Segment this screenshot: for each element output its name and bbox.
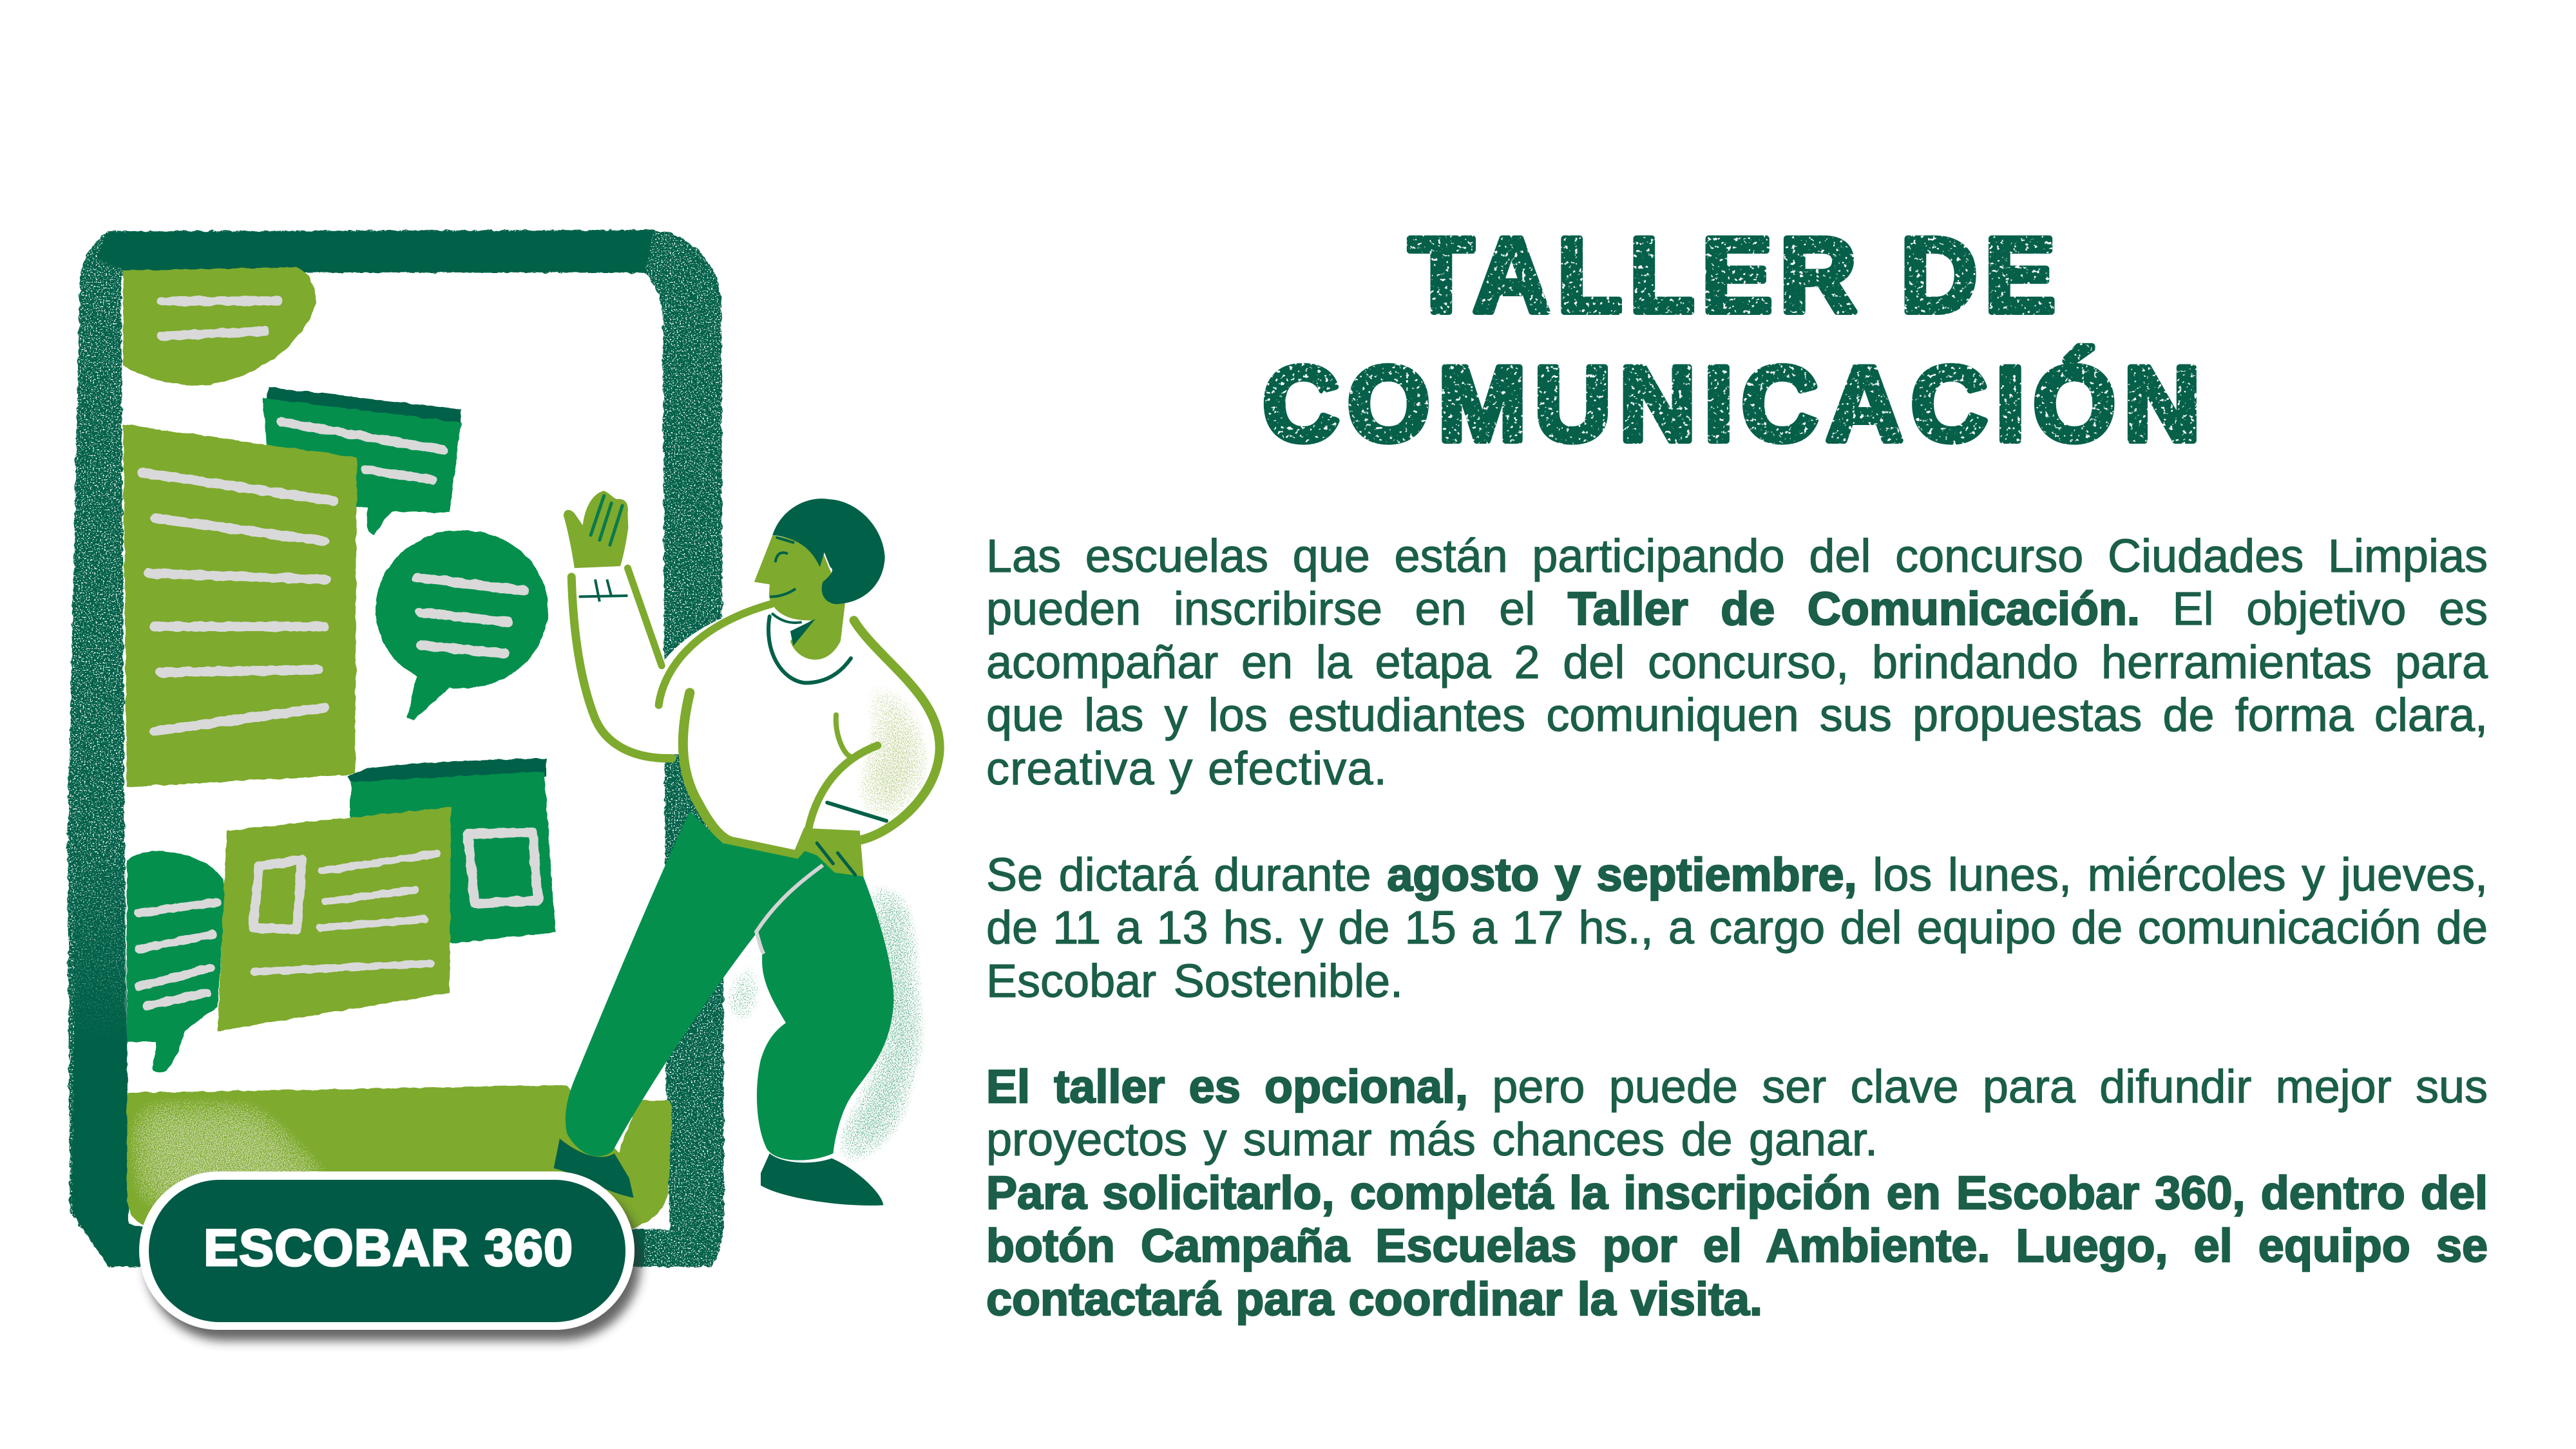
paragraph: intro: acompañar en la etapa 2 del concurso, brindando herramientas para bbox=[986, 636, 2488, 688]
frame solid lower-left band bbox=[72, 837, 644, 1266]
paragraph: schedule: Escobar Sostenible. bbox=[986, 956, 1403, 1007]
paragraph: how to sign up: proyectos y sumar más chances de ganar. bbox=[986, 1114, 1878, 1166]
cuff lines bbox=[579, 580, 627, 601]
paragraph: intro: creativa y efectiva. bbox=[986, 743, 1388, 795]
frame solid top band bbox=[97, 231, 654, 272]
trouser crease bbox=[756, 865, 823, 954]
bubble: top left light green bbox=[123, 267, 316, 386]
paragraph: intro: que las y los estudiantes comuniquen sus propuestas de forma clara, bbox=[986, 690, 2488, 741]
title: TALLER DE bbox=[1409, 216, 2056, 334]
phone frame bbox=[68, 230, 724, 1267]
lower left speech bubble bbox=[127, 851, 225, 1072]
facial details bbox=[768, 538, 851, 683]
raised hand bbox=[564, 491, 628, 568]
sleeve crease bbox=[827, 802, 886, 821]
right shoe bbox=[761, 1153, 883, 1206]
image card: mid green with dark header bbox=[348, 758, 555, 943]
neck shadow bbox=[790, 619, 816, 646]
hair bbox=[772, 498, 885, 604]
light green base of phone bbox=[127, 1085, 672, 1229]
title bbox=[1263, 216, 2200, 463]
paragraph: schedule bbox=[986, 849, 2488, 1007]
light green card with picture and lines bbox=[218, 807, 451, 1031]
hand on hip bbox=[796, 828, 864, 876]
button: ESCOBAR 360: ESCOBAR 360 bbox=[204, 1219, 573, 1277]
trousers bbox=[566, 811, 894, 1160]
title: COMUNICACIÓN bbox=[1263, 345, 2200, 463]
button: ESCOBAR 360 bbox=[139, 1171, 641, 1341]
big text panel light green bbox=[123, 424, 357, 787]
left shoe bbox=[554, 1139, 634, 1198]
paragraph: schedule: de 11 a 13 hs. y de 15 a 17 hs., a cargo del equipo de comunicación de bbox=[986, 902, 2488, 954]
paragraph: intro: Las escuelas que están participando del concurso Ciudades Limpias bbox=[986, 531, 2488, 582]
paragraph: schedule: Se dictará durante agosto y septiembre, los lunes, miércoles y jueves, bbox=[986, 849, 2488, 900]
paragraph: intro bbox=[986, 531, 2488, 795]
paragraph: how to sign up: contactará para coordinar la visita. bbox=[986, 1274, 1762, 1325]
spray inside right sleeve bbox=[844, 650, 934, 831]
round speech bubble bbox=[376, 530, 548, 720]
paragraph: how to sign up: Para solicitarlo, completá la inscripción en Escobar 360, dentro del bbox=[986, 1167, 2488, 1218]
paragraph: how to sign up: botón Campaña Escuelas por el Ambiente. Luego, el equipo se bbox=[986, 1220, 2488, 1272]
paragraph: intro: pueden inscribirse en el Taller de Comunicación. El objetivo es bbox=[986, 583, 2488, 635]
paragraph: how to sign up: El taller es opcional, pero puede ser clave para difundir mejor sus bbox=[986, 1061, 2488, 1113]
shirt white body bbox=[571, 567, 941, 855]
paragraph: how to sign up bbox=[986, 1061, 2488, 1325]
person bbox=[554, 491, 941, 1206]
shirt outlines bbox=[571, 568, 940, 855]
spray shading around legs bbox=[721, 863, 928, 1179]
message card: mid green with dark header bbox=[263, 387, 462, 535]
face and neck bbox=[754, 535, 845, 659]
